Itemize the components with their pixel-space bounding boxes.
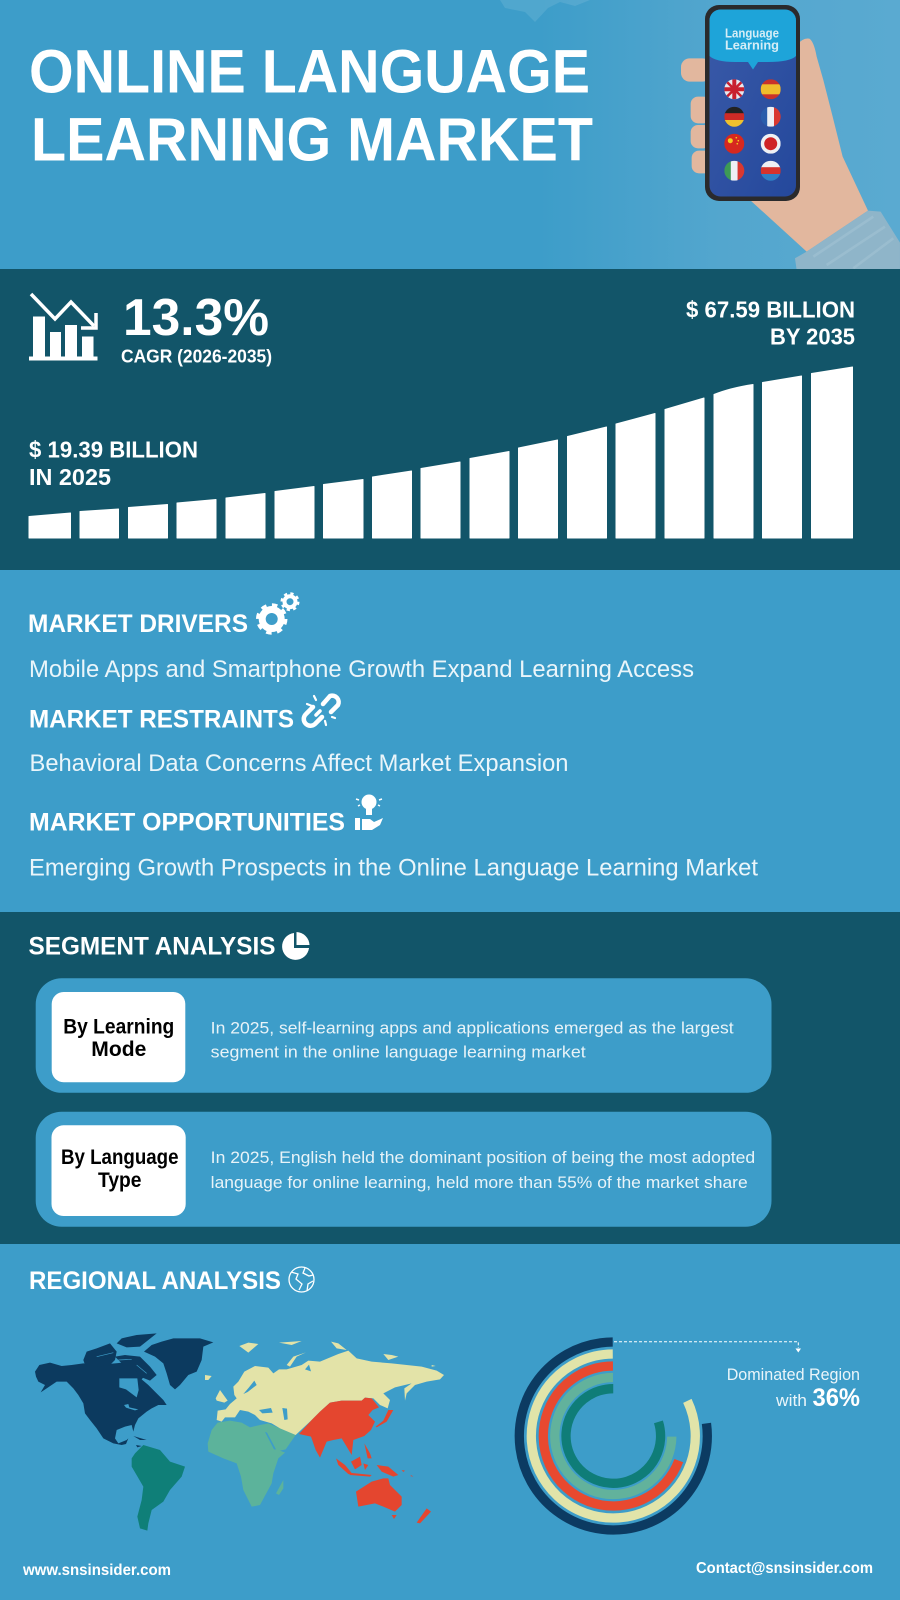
callout: dominated region: 36%	[812, 1384, 860, 1412]
callout leader arrow	[614, 1342, 801, 1352]
callout: dominated region	[727, 1365, 860, 1412]
phone screen heading: Language	[725, 26, 779, 40]
text: learning mode	[211, 1018, 734, 1062]
text: learning mode: segment in the online language learning market	[211, 1043, 586, 1062]
heading: market drivers: MARKET DRIVERS	[28, 610, 248, 638]
card: by language type	[36, 1112, 771, 1227]
radial bar chart	[504, 1327, 723, 1545]
text: driver: Mobile Apps and Smartphone Growth Expand Learning Access	[29, 656, 694, 683]
label: 2035 value	[686, 296, 855, 350]
panel: segment analysis	[0, 912, 900, 1244]
label: 2035 value: BY 2035	[770, 324, 855, 350]
title	[29, 38, 593, 174]
icon: broken link	[304, 696, 339, 726]
text: opportunity: Emerging Growth Prospects in the Online Language Learning Market	[29, 854, 758, 882]
heading: segment analysis: SEGMENT ANALYSIS	[28, 932, 276, 960]
region: north america	[35, 1333, 213, 1447]
label: 2025 value: $ 19.39 BILLION	[29, 436, 198, 462]
label: 2025 value	[29, 436, 198, 490]
phone screen heading	[725, 26, 779, 52]
label box: by language type	[52, 1125, 186, 1216]
CAGR value: 13.3%	[123, 289, 269, 347]
panel: header	[0, 0, 900, 270]
label box: by learning mode: Mode	[91, 1038, 146, 1061]
icon: globe	[289, 1267, 314, 1292]
region: europe and russia	[205, 1341, 444, 1435]
heading: regional analysis: REGIONAL ANALYSIS	[29, 1267, 281, 1295]
panel: market size	[0, 269, 900, 570]
icon: hand holding phone	[681, 5, 900, 270]
CAGR value: CAGR (2026-2035)	[121, 346, 272, 366]
heading: market opportunities: MARKET OPPORTUNITIES	[29, 808, 345, 836]
text: language type	[211, 1148, 755, 1192]
panel: regional analysis	[0, 1244, 900, 1600]
text: restraint: Behavioral Data Concerns Affect Market Expansion	[30, 750, 568, 777]
footer: website: www.snsinsider.com	[22, 1562, 171, 1579]
flags	[724, 79, 781, 181]
label box: by language type: Type	[98, 1169, 142, 1192]
label box: by language type: By Language	[61, 1146, 178, 1169]
title: LEARNING MARKET	[31, 106, 593, 174]
title: ONLINE LANGUAGE	[29, 38, 590, 106]
panel: market dynamics	[0, 570, 900, 912]
icon: pie chart	[282, 932, 310, 960]
label: 2035 value: $ 67.59 BILLION	[686, 296, 855, 322]
region: asia pacific	[299, 1398, 431, 1523]
phone screen heading: Learning	[725, 38, 779, 52]
world map	[35, 1333, 444, 1531]
label: 2025 value: IN 2025	[29, 464, 111, 490]
icon: gears	[258, 594, 298, 632]
card: by learning mode	[36, 978, 771, 1093]
icon: lightbulb in hand	[355, 794, 383, 830]
label box: by learning mode	[52, 992, 185, 1082]
region: south america	[132, 1445, 185, 1531]
label box: by learning mode: By Learning	[63, 1015, 174, 1038]
bar chart: growth	[29, 367, 852, 538]
heading: market restraints: MARKET RESTRAINTS	[29, 706, 294, 734]
text: learning mode: In 2025, self-learning apps and applications emerged as the largest	[211, 1018, 734, 1037]
callout: dominated region: Dominated Region	[727, 1365, 860, 1384]
icon: chart with arrow	[29, 294, 98, 360]
callout: dominated region: with	[775, 1391, 807, 1410]
text: language type: In 2025, English held the dominant position of being the most adopted	[211, 1148, 755, 1167]
region: africa and middle east	[208, 1421, 296, 1507]
text: language type: language for online learning, held more than 55% of the market share	[211, 1173, 748, 1192]
footer: contact: Contact@snsinsider.com	[696, 1560, 873, 1577]
